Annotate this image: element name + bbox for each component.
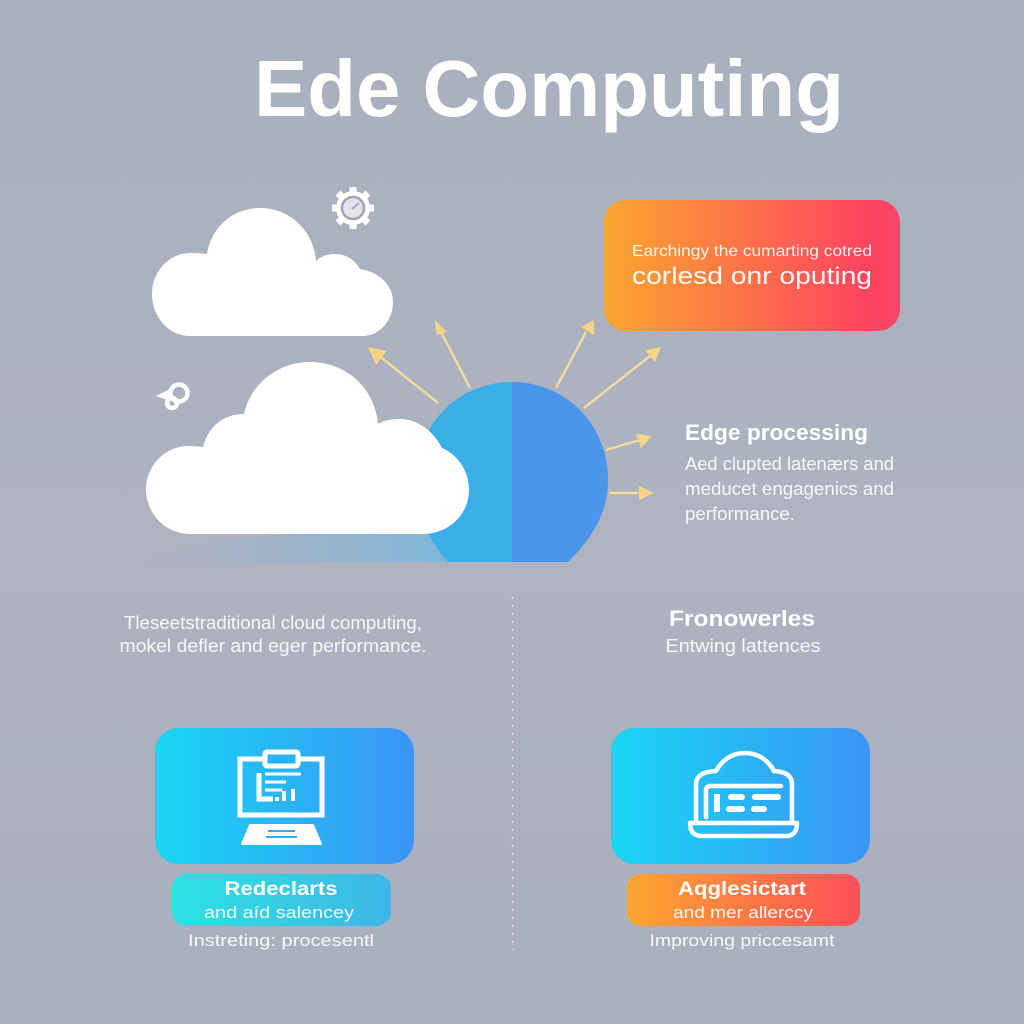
title: Ede Computing [254,44,844,133]
lower cloud [146,362,469,534]
arrow: right lower [609,486,654,500]
callout: orange panel [604,200,900,331]
arrow: upper left far [368,347,438,403]
text block: edge processing: performance. [685,504,795,524]
icon: rocket [156,384,188,408]
text block: fronowerles [666,606,820,656]
label: right orange [627,874,860,926]
panel: left blue card [155,728,414,864]
callout: orange panel: corlesd onr oputing [632,263,872,290]
callout: orange panel: Earchingy the cumarting cotred [632,243,872,260]
divider [512,597,514,950]
panel: right blue card [611,728,870,864]
caption: left: Instreting: procesentl [188,931,374,950]
upper cloud [152,208,393,336]
caption: right: Improving priccesamt [650,931,835,950]
icon: monitor with chart [240,752,322,844]
text block: traditional cloud: Tleseetstraditional cloud computing, [124,613,422,633]
arrow: upper right near [556,320,594,388]
edge sphere [416,382,608,562]
icon: gear [332,187,374,229]
text block: traditional cloud [120,613,426,656]
text block: traditional cloud: mokel defler and eger performance. [120,636,426,656]
arrow: upper right far [584,347,661,408]
arrow: upper left near [435,320,470,388]
text block: edge processing [685,420,894,524]
arrows radiating from sphere [368,320,661,500]
text block: fronowerles: Fronowerles [669,606,815,631]
label: left teal: Redeclarts [224,879,338,900]
label: left teal [172,874,391,926]
label: right orange: Aqglesictart [678,879,807,900]
label: right orange: and mer allerccy [673,903,814,922]
text block: fronowerles: Entwing lattences [666,636,820,656]
text block: edge processing: meducet engagenics and [685,479,894,499]
text block: edge processing: Edge processing [685,420,868,445]
label: left teal: and aíd salencey [204,903,355,922]
ground shadow [140,534,460,562]
icon: cloud laptop [690,753,797,836]
arrow: right upper [606,434,652,450]
text block: edge processing: Aed clupted latenærs and [685,454,894,474]
